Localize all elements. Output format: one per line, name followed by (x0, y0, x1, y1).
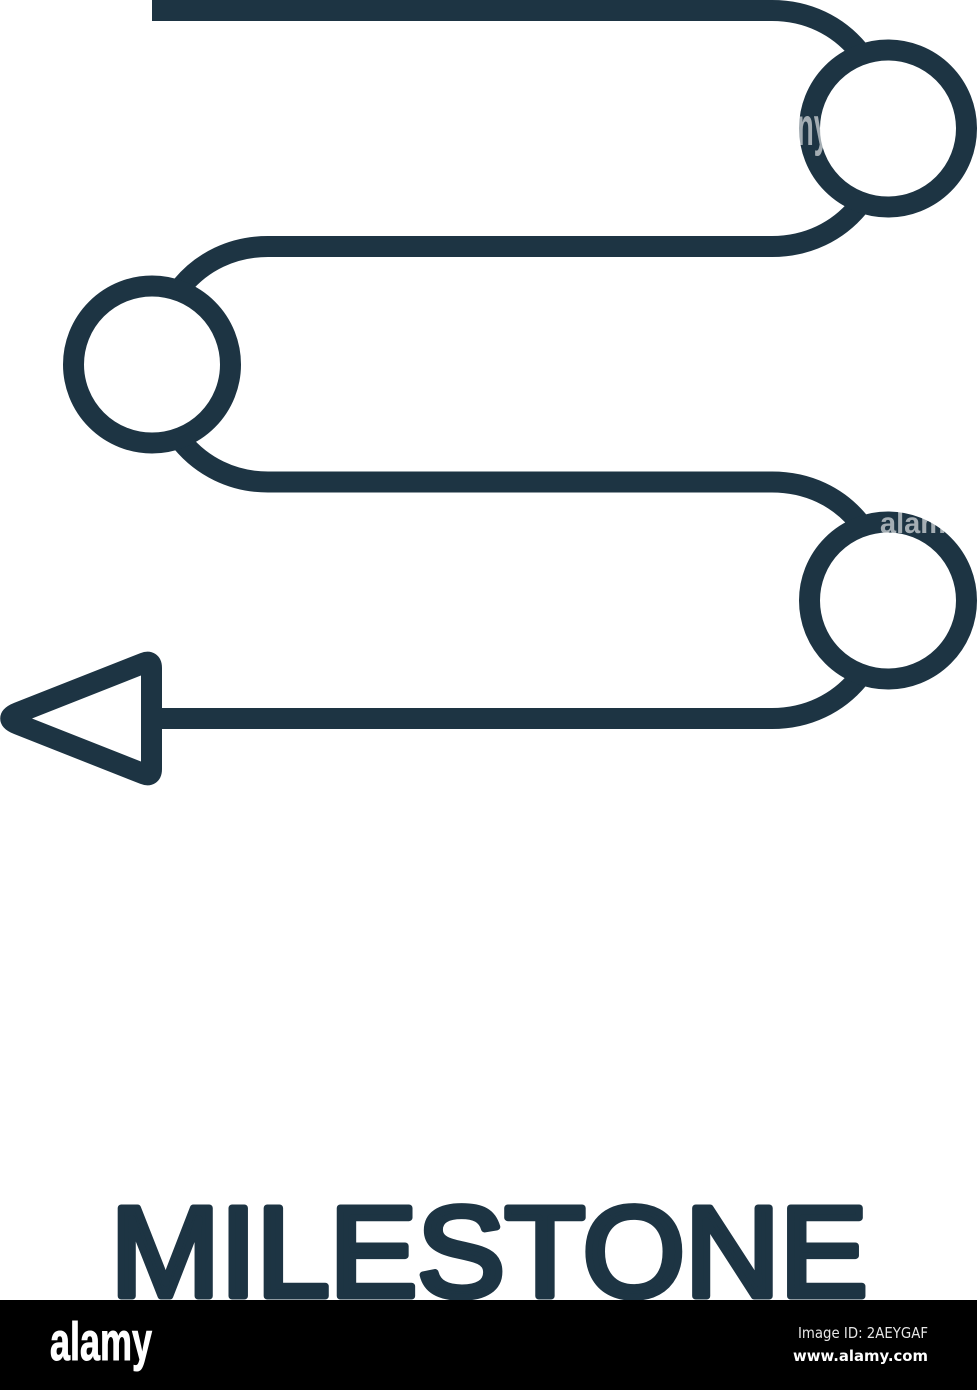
image id: Image ID: 2AEYGAF (798, 1324, 928, 1342)
milestone circle 3 (810, 522, 966, 679)
footer logo: alamy (50, 1312, 152, 1372)
watermark: circle 1: ny (797, 97, 829, 157)
path: serpentine line (152, 10, 858, 718)
footer bar (0, 1300, 977, 1390)
icon: winding milestone path with arrow (11, 10, 966, 775)
watermark fragments (797, 97, 946, 540)
title: MILESTONE (110, 1181, 868, 1324)
milestone circle 2 (74, 286, 230, 443)
website: www.alamy.com (793, 1347, 928, 1365)
watermark: circle 3: alam (880, 507, 946, 540)
arrowhead (11, 662, 152, 775)
milestone circle 1 (810, 50, 966, 207)
